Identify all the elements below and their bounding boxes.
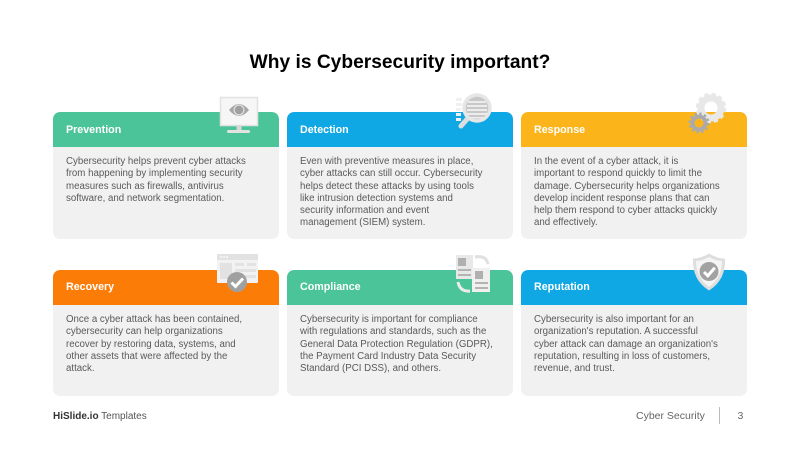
text: recovery: other assets that were affected by the [66, 351, 227, 362]
text: recovery: Once a cyber attack has been contained, [66, 314, 242, 325]
heading: compliance: Compliance [300, 280, 361, 292]
footer section name: Cyber Security [636, 410, 705, 422]
icon: shield with check [693, 254, 725, 290]
text: prevention: from happening by implementing security [66, 168, 243, 179]
heading: prevention [53, 112, 279, 147]
heading: recovery: Recovery [66, 280, 114, 292]
text: reputation: organization's reputation. A successful [534, 326, 698, 337]
heading: detection [287, 112, 513, 147]
text: detection [300, 156, 483, 228]
icon: documents with exchange arrows [456, 255, 490, 293]
page number: 3 [738, 410, 743, 422]
text: recovery: attack. [66, 363, 95, 374]
heading: recovery [53, 270, 279, 304]
panel: prevention [53, 112, 279, 239]
text: prevention [66, 156, 246, 204]
text: reputation [534, 314, 718, 374]
text: response: In the event of a cyber attack, it is [534, 156, 678, 167]
text: detection: cyber attacks can still occur. Cybersecurity [300, 168, 483, 179]
text: prevention: Cybersecurity helps prevent cyber attacks [66, 156, 246, 167]
text: response: and effectively. [534, 217, 598, 228]
footer brand: HiSlide.io Templates [53, 411, 147, 422]
text: prevention: software, and network segmentation. [66, 193, 224, 204]
panel: reputation [521, 270, 747, 396]
text: recovery: recover by restoring data, systems, and [66, 339, 236, 350]
panel: response [521, 112, 747, 239]
text: response: damage. Cybersecurity helps organizations [534, 181, 720, 192]
heading: reputation: Reputation [534, 280, 590, 292]
heading: compliance [287, 270, 513, 304]
text: detection: helps detect these attacks by using tools [300, 181, 474, 192]
text: reputation: Cybersecurity is also important for an [534, 314, 694, 325]
text: detection: security information and event [300, 205, 429, 216]
text: detection: Even with preventive measures in place, [300, 156, 473, 167]
icon: monitor with eye [220, 96, 258, 133]
panel: compliance [287, 270, 513, 396]
text: detection: management (SIEM) system. [300, 217, 425, 228]
heading: reputation [521, 270, 747, 304]
heading: detection: Detection [300, 124, 349, 136]
text: response: help them respond to cyber attacks quickly [534, 205, 717, 216]
text: compliance [300, 314, 493, 374]
text: compliance: with regulations and standards, such as the [300, 326, 486, 337]
text: prevention: measures such as firewalls, antivirus [66, 181, 224, 192]
text: response: important to respond quickly to limit the [534, 168, 702, 179]
text: reputation: reputation, resulting in loss of customers, [534, 351, 710, 362]
icon: gears [688, 92, 726, 134]
text: reputation: revenue, and trust. [534, 363, 615, 374]
heading: response [521, 112, 747, 147]
panel: detection [287, 112, 513, 239]
text: compliance: General Data Protection Regulation (GDPR), [300, 339, 493, 350]
icon: browser window with check [217, 254, 258, 292]
text: reputation: cyber attack can damage an organization's [534, 339, 718, 350]
text: recovery: cybersecurity can help organizations [66, 326, 223, 337]
heading: prevention: Prevention [66, 124, 121, 136]
text: compliance: Standard (PCI DSS), and others. [300, 363, 441, 374]
text: recovery [66, 314, 242, 374]
text: response [534, 156, 720, 228]
text: detection: like intrusion detection systems and [300, 193, 453, 204]
heading: response: Response [534, 124, 585, 136]
title: Why is Cybersecurity important? [250, 52, 550, 73]
icon: magnifying glass over binary [456, 93, 492, 128]
text: compliance: Cybersecurity is important for compliance [300, 314, 478, 325]
panel: recovery [53, 270, 279, 396]
text: response: develop incident response plans that can [534, 193, 710, 204]
text: compliance: the Payment Card Industry Data Security [300, 351, 476, 362]
